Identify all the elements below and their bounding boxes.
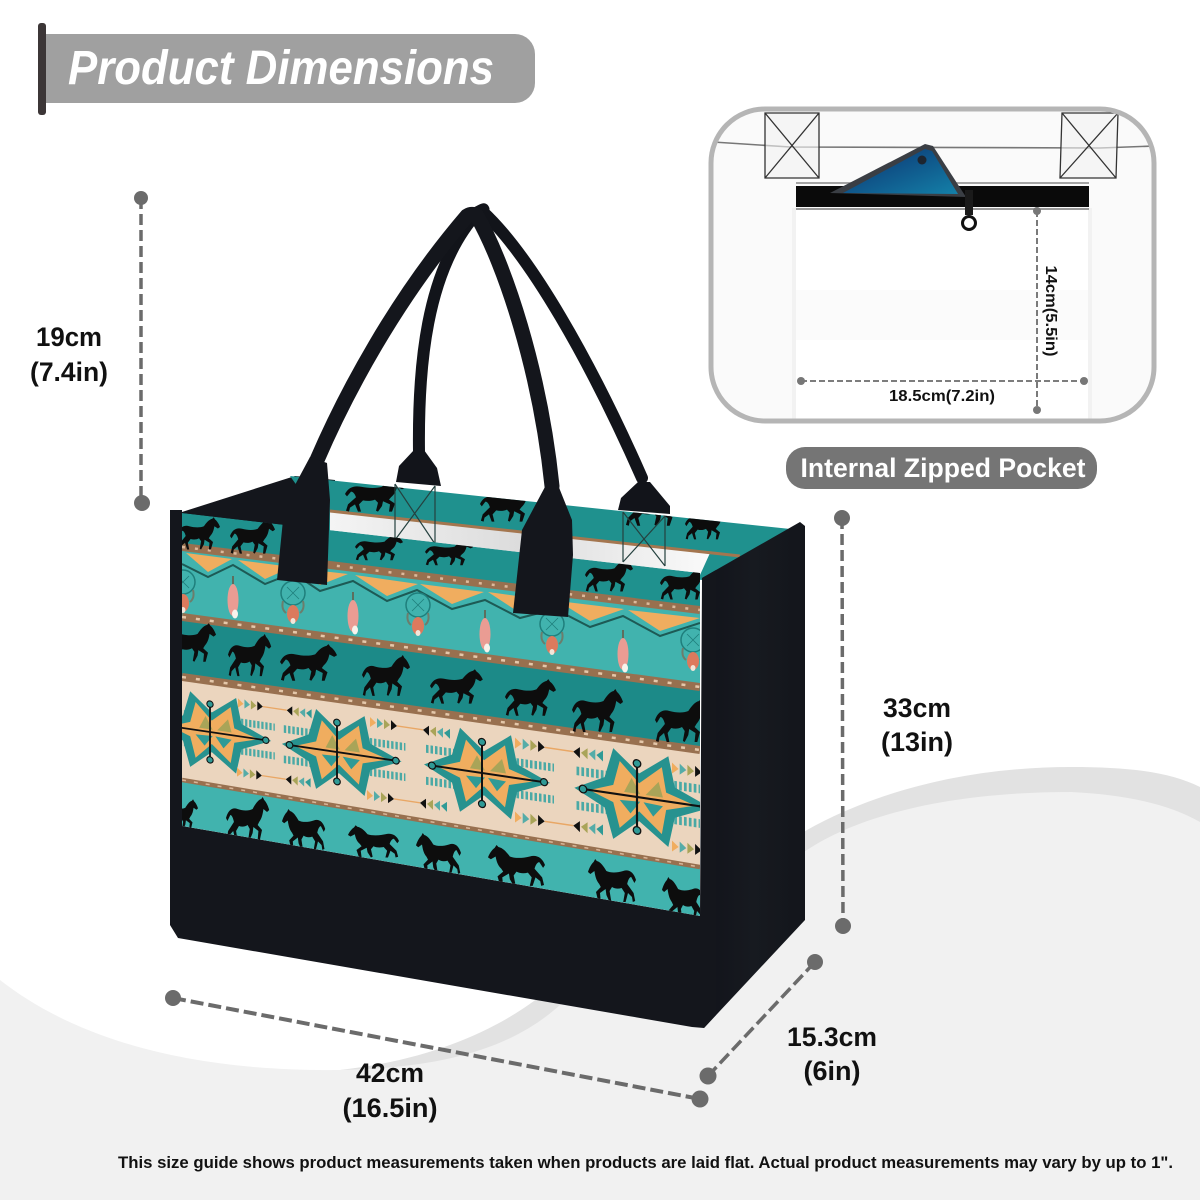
orange chevrons [186, 553, 700, 631]
back handle tabs [396, 450, 670, 514]
pocket height dimension [1033, 207, 1059, 414]
feathers and dreamcatchers [171, 570, 705, 672]
back panel pattern [290, 476, 800, 580]
pocket width dimension: 18.5cm(7.2in) [889, 388, 995, 405]
handle anchor stitch left [765, 113, 819, 178]
front handle tabs [277, 457, 573, 617]
bag side gusset [702, 522, 805, 1028]
star motifs [182, 691, 700, 847]
stitching [713, 142, 1154, 148]
bag front black base [170, 510, 716, 1028]
top horses [178, 517, 708, 600]
internal pocket panel [711, 109, 1154, 422]
phone in pocket [830, 144, 966, 197]
footnote: This size guide shows product measurements taken when products are laid flat. Actual product measurements may vary by up to 1". [118, 1153, 1173, 1172]
front printed panel [182, 513, 700, 916]
bag height dimension [834, 510, 953, 934]
pocket label pill: Internal Zipped Pocket [800, 453, 1086, 483]
pocket height dimension: 14cm(5.5in) [1042, 266, 1059, 356]
woven stripes [182, 547, 700, 867]
back handle [419, 209, 642, 478]
bag depth dimension: (6in) [804, 1056, 860, 1086]
bag depth dimension [700, 954, 877, 1086]
title banner: Product Dimensions [68, 42, 494, 95]
pocket width dimension [797, 377, 1088, 405]
middle horses [168, 623, 709, 742]
height dimension for handle: (7.4in) [30, 357, 108, 387]
title banner [38, 23, 535, 115]
arrow motifs [237, 698, 700, 855]
bag depth dimension: 15.3cm [787, 1022, 877, 1052]
zipper [796, 183, 1089, 209]
bag width dimension: (16.5in) [342, 1093, 438, 1123]
teal and beige bands [182, 513, 700, 916]
bottom horses [165, 797, 704, 920]
pocket label pill [786, 447, 1097, 489]
zip pull [962, 190, 976, 230]
interior gussets [182, 476, 335, 535]
bag width dimension [165, 990, 708, 1123]
height dimension for handle: 19cm [36, 322, 102, 352]
handle anchor stitch right [1060, 113, 1118, 178]
pocket lining shading [792, 208, 1092, 418]
bag height dimension: 33cm [883, 693, 951, 723]
bag height dimension: (13in) [881, 727, 953, 757]
zigzag line [182, 564, 700, 636]
height dimension for handle [30, 191, 150, 511]
front handle [317, 214, 552, 486]
bag width dimension: 42cm [356, 1058, 424, 1088]
tote bag [158, 209, 805, 1028]
